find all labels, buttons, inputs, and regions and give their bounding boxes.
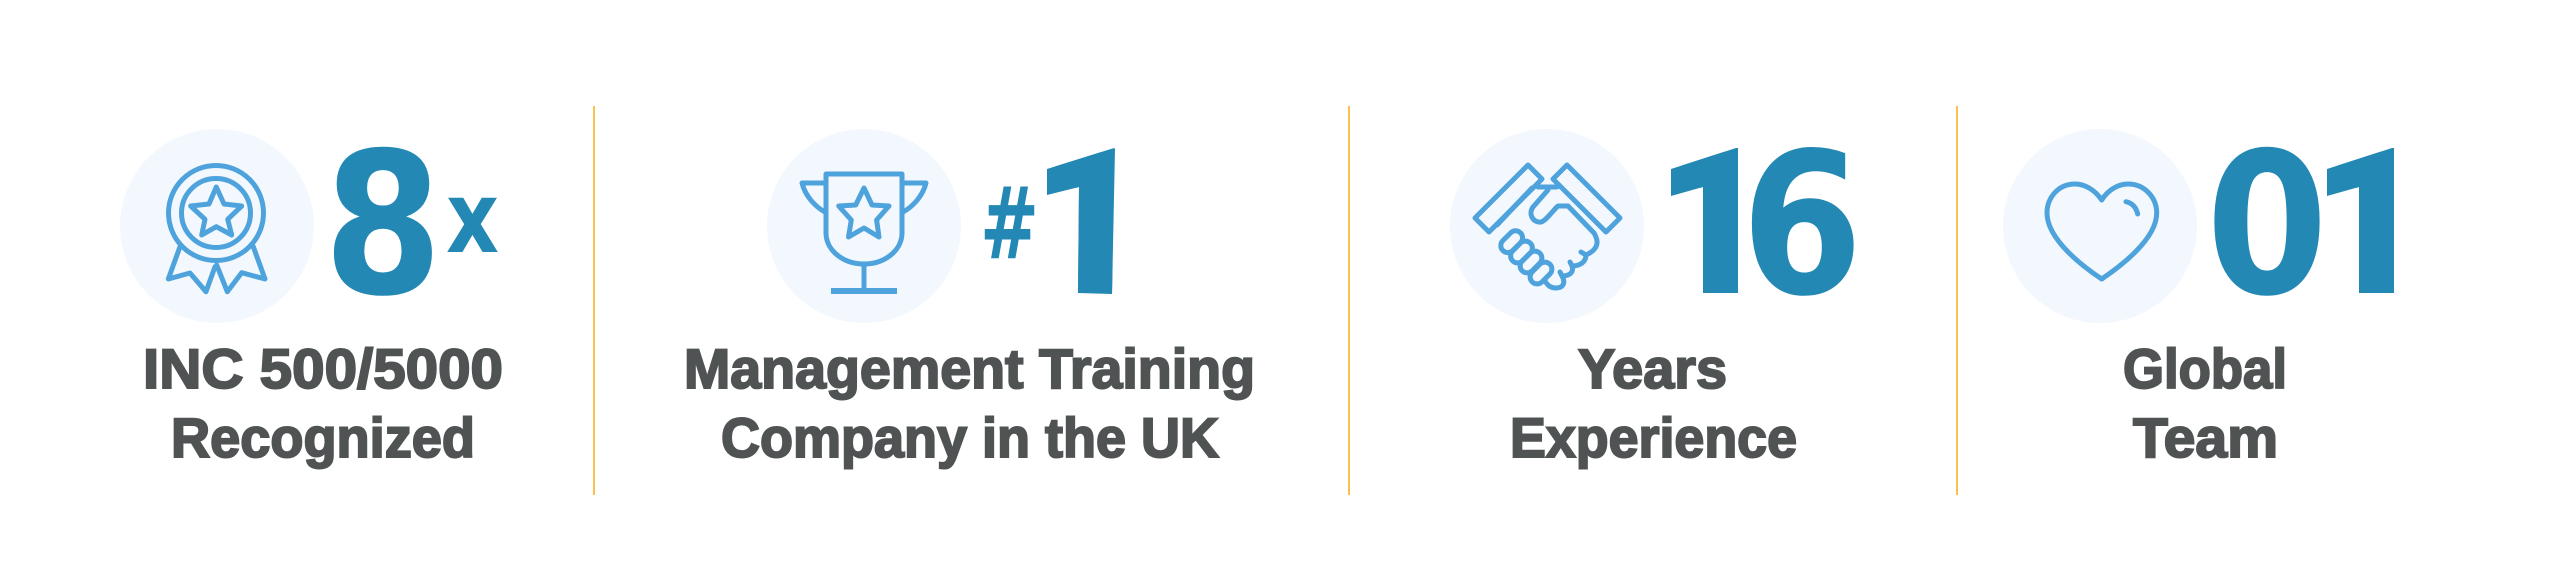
label: INC 500/5000 Recognized: Recognized (171, 406, 475, 469)
stat: 01: 1 (2322, 68, 2409, 350)
label: INC 500/5000 Recognized (143, 337, 503, 469)
label: Global Team (2123, 337, 2287, 469)
panel: 16 years experience (1450, 129, 1854, 470)
label: Global Team: Team (2133, 406, 2278, 469)
stat: 16 (1671, 147, 1854, 296)
stat: #1 (984, 148, 1115, 294)
label: Years Experience (1510, 337, 1797, 469)
label: Years Experience: Experience (1510, 406, 1797, 469)
stat: 8x: x (446, 161, 499, 276)
stat: 16: 1 (1666, 68, 1753, 350)
panel: number one management training company (686, 129, 1252, 470)
stat: 16: 6 (1741, 111, 1863, 340)
panel: 01 global team (2003, 129, 2394, 458)
stat: #1: # (980, 165, 1039, 282)
stat: 01 (2214, 146, 2394, 296)
stat: 01: 0 (2206, 111, 2328, 340)
label: Global Team: Global (2123, 337, 2287, 400)
stat: #1: 1 (1041, 68, 1128, 350)
icon: heart (2003, 129, 2197, 323)
label: Management Training Company in the UK: Company in the UK (721, 406, 1219, 469)
label: Management Training Company in the UK (684, 337, 1255, 469)
label: INC 500/5000 Recognized: INC 500/5000 (143, 337, 503, 400)
stat: 8x: 8 (324, 111, 442, 340)
label: Years Experience: Years (1578, 337, 1727, 400)
panel: INC 500/5000 recognized (120, 111, 503, 469)
icon: handshake (1450, 129, 1644, 323)
label: Management Training Company in the UK: Management Training (684, 337, 1255, 400)
icon: trophy (767, 129, 961, 323)
icon: medal (120, 129, 314, 323)
